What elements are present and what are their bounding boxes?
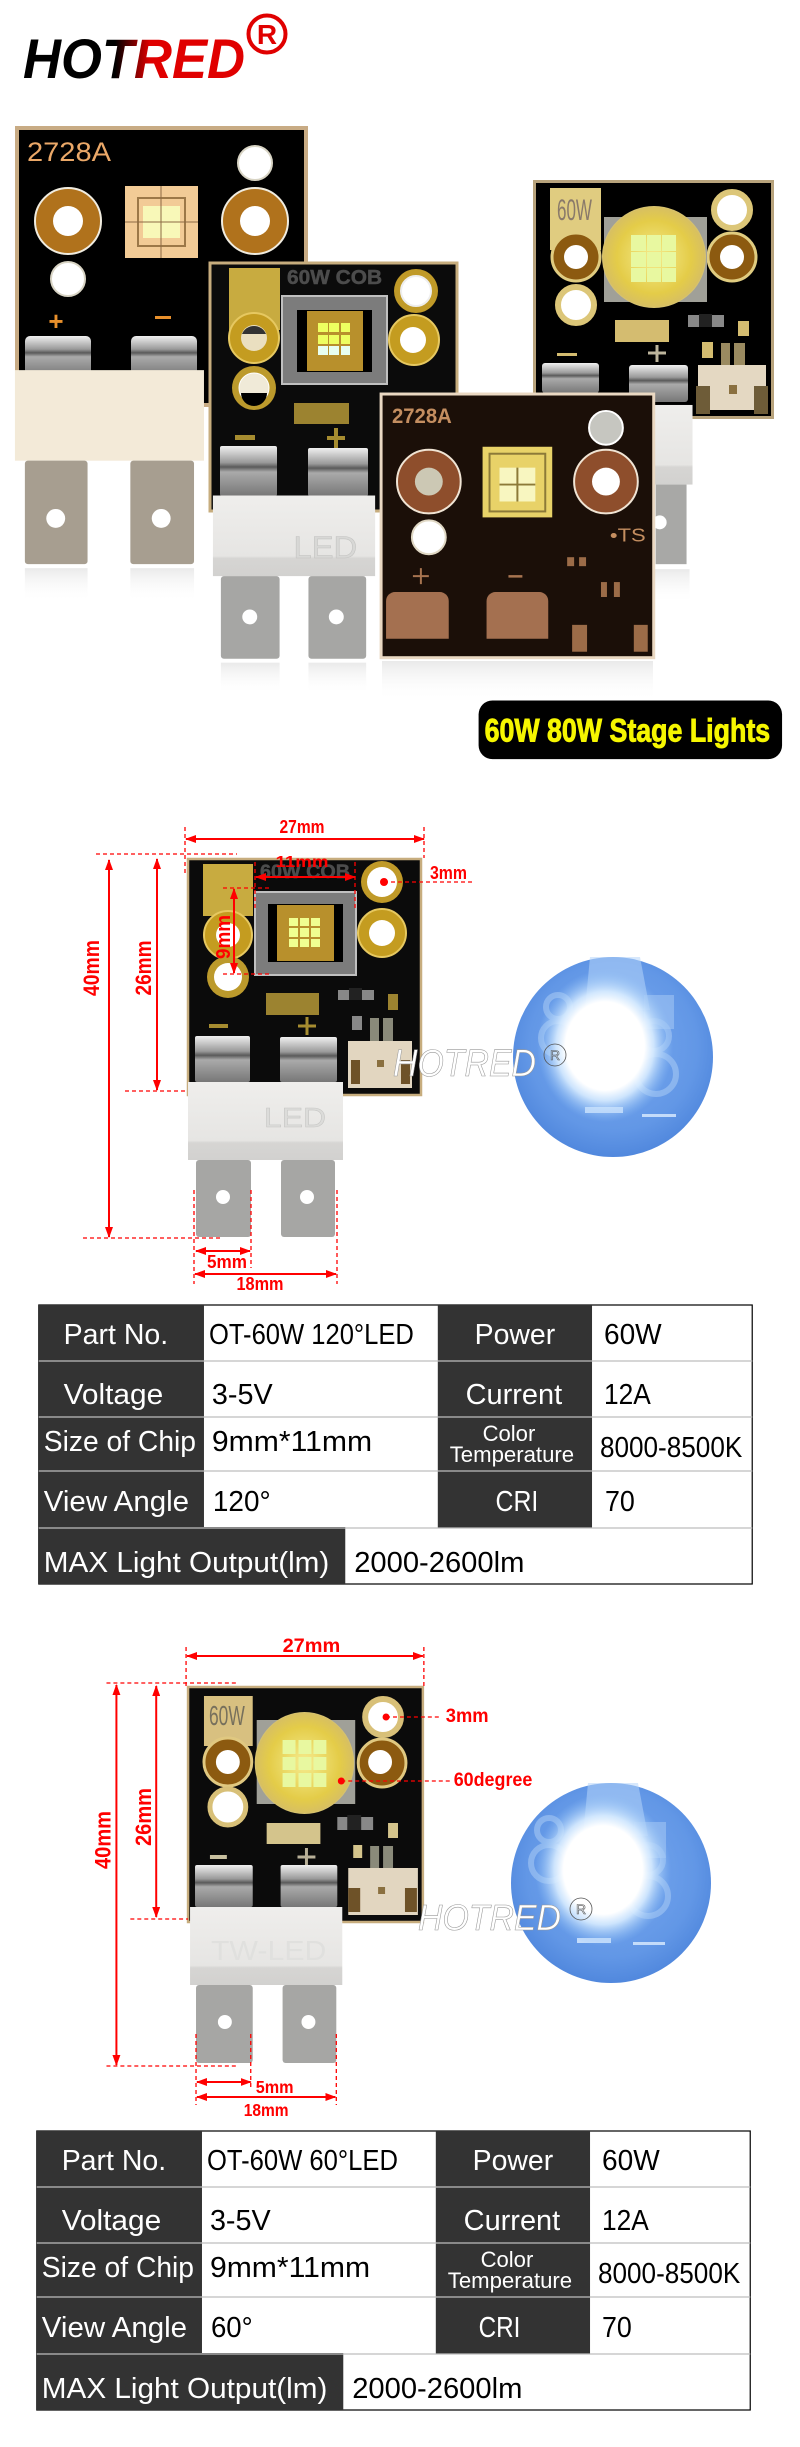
diagram 1: red dimension lines and labels: 40mm: [79, 940, 104, 996]
spec table 2: OT-60W 60°LED: 60°: [211, 2312, 253, 2344]
spec table 2: OT-60W 60°LED: 12A: [602, 2205, 649, 2237]
spec table 1: OT-60W 120°LED: Part No.: [64, 1319, 168, 1351]
diagram 2: red dimension lines and labels: 27mm: [283, 1636, 340, 1657]
diagram 2: red dimension lines and labels: 60degree: [454, 1770, 532, 1791]
spec table 1: OT-60W 120°LED: 70: [605, 1486, 635, 1518]
spec table 1: OT-60W 120°LED: 3-5V: [212, 1379, 273, 1411]
product photo: back right 60W board: [534, 182, 772, 418]
spec table 1: OT-60W 120°LED: 2000-2600lm: [354, 1547, 524, 1579]
diagram 1: red dimension lines and labels: 26mm: [131, 940, 156, 996]
badge: 60W 80W Stage Lights: [479, 700, 782, 759]
diagram 1: 60W COB board photo: 60W COB: [260, 862, 350, 883]
diagram 2: lit LED blue glow circle: [511, 1783, 711, 1983]
diagram 1: 60W COB board photo: LED: [264, 1102, 326, 1133]
product photo: middle board white block and tabs: [213, 496, 375, 695]
spec table 2: OT-60W 60°LED: Current: [464, 2205, 560, 2237]
spec table 2: OT-60W 60°LED: OT-60W 60°LED: [207, 2145, 398, 2177]
spec table 2: OT-60W 60°LED: Power: [473, 2145, 554, 2177]
product photo: middle 60W COB board: 60W COB: [287, 267, 382, 289]
spec table 2: OT-60W 60°LED: Size of Chip: [42, 2252, 194, 2284]
brand logo: HOTRED: HOTRED: [23, 27, 245, 90]
spec table 1: OT-60W 120°LED: [39, 1305, 752, 1584]
spec table 1: OT-60W 120°LED: 8000-8500K: [600, 1432, 742, 1464]
product photo: back left board 2728A: +: [48, 306, 64, 336]
product photo: left board white block and tabs: [15, 370, 204, 602]
diagram 2: 60W lens board photo: TW-LED: [211, 1935, 326, 1966]
spec table 2: OT-60W 60°LED: CRI: [479, 2312, 520, 2344]
product photo: back left board 2728A: [17, 128, 306, 405]
spec table 2: OT-60W 60°LED: Voltage: [62, 2205, 161, 2237]
diagram 1: red dimension lines and labels: 18mm: [236, 1274, 284, 1294]
spec table 2: OT-60W 60°LED: 70: [602, 2312, 632, 2344]
product photo: front brown 2728A board: 2728A: [392, 405, 452, 428]
product photo: back right 60W board: 60W: [557, 194, 592, 227]
diagram 2: red dimension lines and labels: 3mm: [446, 1706, 489, 1727]
diagram 1: 60W COB board photo: [188, 859, 421, 1237]
spec table 1: OT-60W 120°LED: 12A: [604, 1379, 651, 1411]
spec table 2: OT-60W 60°LED: 60W: [602, 2145, 660, 2177]
diagram 2: HOTRED watermark: R: [576, 1901, 586, 1917]
spec table 1: OT-60W 120°LED: Voltage: [64, 1379, 163, 1411]
diagram 1: lit LED blue glow circle: [513, 957, 713, 1157]
product photo: back right connector block and tab: [617, 405, 693, 604]
diagram 2: red dimension lines and labels: 5mm: [256, 2077, 294, 2097]
spec table 1: OT-60W 120°LED: MAX Light Output(lm): [44, 1547, 329, 1579]
spec table 2: OT-60W 60°LED: 9mm*11mm: [210, 2252, 370, 2284]
spec table 2: OT-60W 60°LED: Temperature: [448, 2268, 572, 2293]
spec table 2: OT-60W 60°LED: MAX Light Output(lm): [42, 2373, 327, 2405]
spec table 1: OT-60W 120°LED: Size of Chip: [44, 1426, 196, 1458]
diagram 1: HOTRED watermark: HOTRED: [393, 1043, 536, 1085]
product photo: front brown 2728A board: [381, 394, 654, 658]
spec table 1: OT-60W 120°LED: Color: [483, 1421, 535, 1446]
diagram 1: red dimension lines and labels: 9mm: [213, 915, 235, 959]
spec table 1: OT-60W 120°LED: Current: [466, 1379, 562, 1411]
spec table 2: OT-60W 60°LED: Color: [481, 2247, 533, 2272]
product photo: middle 60W COB board: [210, 263, 457, 511]
product photo: front brown 2728A board: •TS: [610, 525, 646, 546]
diagram 1: red dimension lines and labels: 5mm: [207, 1252, 247, 1272]
brand logo: HOTRED: R: [257, 19, 277, 50]
diagram 1: red dimension lines and labels: 3mm: [430, 863, 467, 883]
front board reflection: [382, 661, 653, 701]
diagram 1: HOTRED watermark: R: [550, 1047, 560, 1063]
spec table 2: OT-60W 60°LED: Part No.: [62, 2145, 166, 2177]
diagram 1: red dimension lines and labels: 27mm: [280, 817, 324, 837]
diagram 2: 60W lens board photo: 60W: [209, 1700, 245, 1731]
diagram 2: red dimension lines and labels: [90, 1636, 532, 2120]
spec table 1: OT-60W 120°LED: 9mm*11mm: [212, 1426, 372, 1458]
diagram 1: red dimension lines and labels: [79, 817, 474, 1294]
product photo: middle board white block and tabs: LED: [294, 529, 357, 565]
spec table 1: OT-60W 120°LED: OT-60W 120°LED: [209, 1319, 414, 1351]
diagram 2: red dimension lines and labels: 26mm: [131, 1788, 156, 1846]
diagram 2: HOTRED watermark: HOTRED: [418, 1897, 561, 1938]
diagram 2: 60W lens board photo: [188, 1687, 423, 2063]
spec table 1: OT-60W 120°LED: CRI: [496, 1486, 538, 1518]
spec table 2: OT-60W 60°LED: [37, 2131, 750, 2410]
spec table 1: OT-60W 120°LED: 120°: [213, 1486, 271, 1518]
spec table 1: OT-60W 120°LED: 60W: [604, 1319, 662, 1351]
spec table 1: OT-60W 120°LED: View Angle: [44, 1486, 189, 1518]
diagram 2: red dimension lines and labels: 40mm: [90, 1811, 115, 1869]
product photo: back left board 2728A: 2728A: [27, 137, 111, 167]
diagram 1: red dimension lines and labels: 11mm: [276, 854, 328, 871]
spec table 1: OT-60W 120°LED: Power: [475, 1319, 556, 1351]
spec table 1: OT-60W 120°LED: Temperature: [450, 1442, 574, 1467]
spec table 2: OT-60W 60°LED: 3-5V: [210, 2205, 271, 2237]
spec table 2: OT-60W 60°LED: 8000-8500K: [598, 2258, 740, 2290]
spec table 2: OT-60W 60°LED: View Angle: [42, 2312, 187, 2344]
spec table 2: OT-60W 60°LED: 2000-2600lm: [352, 2373, 522, 2405]
diagram 2: red dimension lines and labels: 18mm: [244, 2100, 289, 2120]
